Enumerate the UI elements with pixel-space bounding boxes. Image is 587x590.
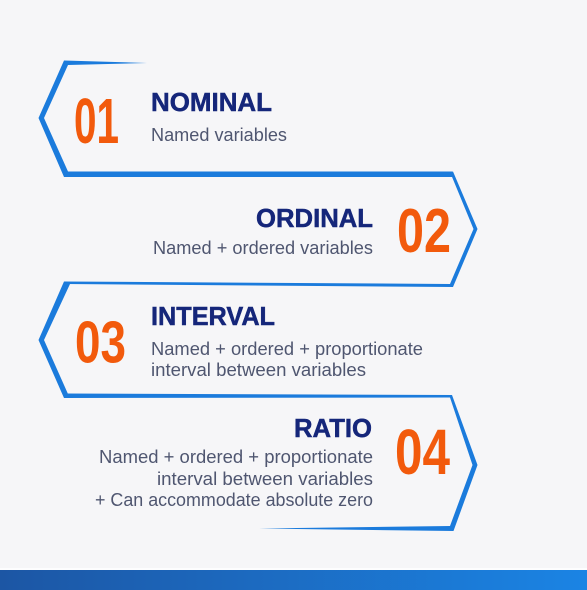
panel: interval [38,282,423,398]
number 02: 02 [397,197,451,266]
page edge highlight [0,568,587,570]
description: ordinal: Named + ordered variables [153,238,373,258]
frame: ordinal [64,172,478,287]
footer bar [0,570,587,590]
panel: ratio: interval between variables [157,469,373,489]
panel: ratio: + Can accommodate absolute zero [95,490,373,510]
description: interval: Named + ordered + proportionate [151,339,423,359]
heading: ratio: RATIO [294,413,372,443]
panel: nominal [38,60,452,177]
number 04: 04 [395,416,450,488]
number 03: 03 [75,310,126,376]
frame: ratio [64,394,478,531]
description: ratio: Named + ordered + proportionate [99,447,373,467]
panel: ordinal [64,172,478,287]
heading: nominal: NOMINAL [151,87,272,117]
description: nominal: Named variables [151,125,287,145]
panel: interval: interval between variables [151,360,366,380]
frame: interval [38,282,70,398]
panel: ratio [64,394,478,531]
frame: nominal [38,60,452,177]
heading: interval: INTERVAL [151,301,275,331]
number 01: 01 [74,85,119,157]
heading: ordinal: ORDINAL [256,203,373,233]
